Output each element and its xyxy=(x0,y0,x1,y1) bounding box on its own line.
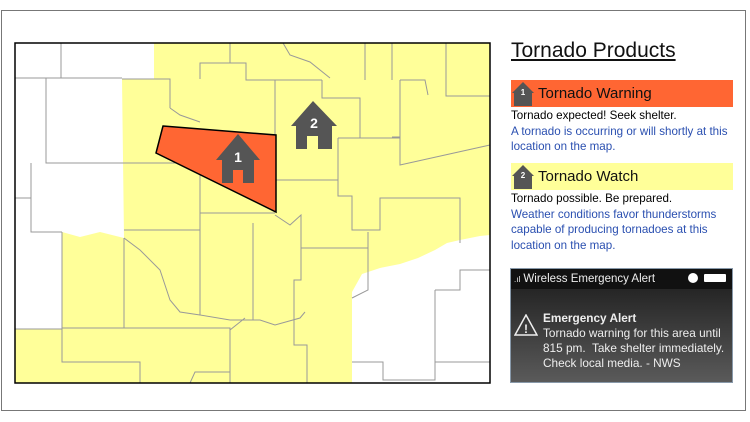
warning text: location on the map. xyxy=(511,140,615,153)
alert text: Emergency Alert xyxy=(543,311,636,325)
icon: house 1: 1 xyxy=(234,149,242,165)
title: Tornado Products xyxy=(511,39,676,62)
watch text: location on the map. xyxy=(511,238,615,252)
alert text xyxy=(543,311,724,370)
icon: house 2: 2 xyxy=(310,115,318,131)
warning text: Tornado expected! Seek shelter. xyxy=(511,109,677,122)
alert text: Check local media. - NWS xyxy=(543,356,681,370)
phone header: .ıl Wireless Emergency Alert xyxy=(514,273,655,285)
watch bar: Tornado Watch xyxy=(538,168,638,185)
icon: house 2 xyxy=(291,101,337,149)
warning bar: 1 xyxy=(521,88,526,97)
warning bar xyxy=(511,80,733,107)
icon: warning triangle xyxy=(514,314,538,336)
watch bar: 2 xyxy=(521,171,526,180)
watch text xyxy=(511,192,716,252)
warning bar: Tornado Warning xyxy=(538,85,652,102)
icon: warning triangle: ! xyxy=(524,322,528,336)
icon: house 1 xyxy=(216,134,260,183)
watch bar xyxy=(511,163,733,190)
alert text: Tornado warning for this area until xyxy=(543,326,721,340)
watch text: Weather conditions favor thunderstorms xyxy=(511,208,716,220)
panel: tornado warning xyxy=(511,80,733,153)
panel: tornado watch xyxy=(511,163,733,252)
warning text: A tornado is occurring or will shortly at this xyxy=(511,124,728,138)
phone header xyxy=(511,269,732,289)
watch text: capable of producing tornadoes at this xyxy=(511,223,708,236)
watch text: Tornado possible. Be prepared. xyxy=(511,192,672,205)
alert text: 815 pm. Take shelter immediately. xyxy=(543,341,724,355)
panel: wireless emergency alert xyxy=(510,268,733,383)
warning text xyxy=(511,109,728,153)
map xyxy=(14,42,491,384)
